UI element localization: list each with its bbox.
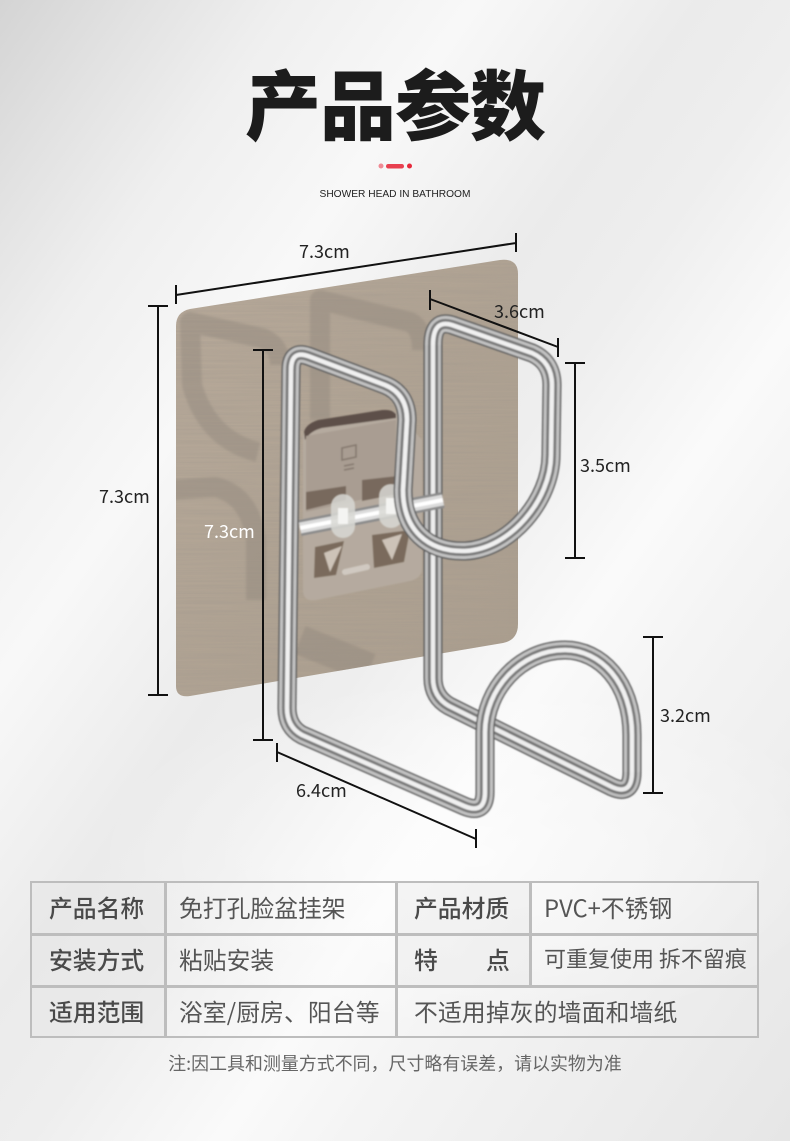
row 1 label 2 <box>396 883 530 934</box>
dimension lines <box>148 233 663 848</box>
dimension labels: 7.3cm <box>299 238 350 264</box>
dimension: upper hook depth <box>430 290 558 357</box>
row 1 value: 免打孔脸盆挂架 <box>179 889 346 924</box>
dimension labels: 6.4cm <box>296 777 347 803</box>
icon: clear adhesive hook base <box>303 410 422 600</box>
dimension labels: 7.3cm <box>204 518 255 544</box>
dimension labels <box>99 238 711 803</box>
row 3 label <box>32 987 165 1036</box>
row 2 label 2 <box>396 935 530 985</box>
footnote: 注:因工具和测量方式不同，尺寸略有误差，请以实物为准 <box>168 1050 622 1076</box>
dimension labels: 7.3cm <box>99 483 150 509</box>
front wire loop <box>287 324 632 809</box>
row 1 label: 产品名称 <box>49 889 144 924</box>
row 1 label <box>32 883 165 934</box>
dimension: upper hook height <box>565 363 585 558</box>
row 2 label 2: 点 <box>486 941 510 976</box>
dimension: lower hook height <box>643 637 663 793</box>
product illustration with dimensions <box>100 233 710 848</box>
title: 产品参数 <box>245 66 545 151</box>
row 3 value: 浴室/厨房、阳台等 <box>179 993 380 1028</box>
dimension labels: 3.6cm <box>494 298 545 324</box>
dimension labels: 3.2cm <box>660 702 711 728</box>
back wire arm <box>433 345 632 789</box>
dimension labels: 3.5cm <box>580 452 631 478</box>
row 1 value 2: PVC+不锈钢 <box>544 889 672 924</box>
subtitle: SHOWER HEAD IN BATHROOM <box>320 189 470 200</box>
row 2 label 2: 特 <box>414 941 438 976</box>
row 2 label <box>32 935 165 985</box>
icon: stainless steel wire rack <box>287 324 632 809</box>
row 2 value 2: 可重复使用 拆不留痕 <box>544 942 747 974</box>
row 2 value: 粘贴安装 <box>179 941 274 976</box>
row 3 value 2: 不适用掉灰的墙面和墙纸 <box>414 993 677 1028</box>
dimension: plate top width <box>176 233 516 304</box>
panel: adhesive plate <box>170 255 525 705</box>
crossbar with clear clips <box>300 496 443 528</box>
row 1 label 2: 产品材质 <box>414 889 509 924</box>
dimension: rack height <box>253 350 273 740</box>
row 3 label: 适用范围 <box>49 993 144 1028</box>
table: product parameters <box>30 881 759 1038</box>
dimension: plate height <box>148 306 168 695</box>
dimension: rack depth <box>277 743 476 848</box>
row 2 label: 安装方式 <box>49 941 144 976</box>
decorative red dash <box>378 164 412 168</box>
